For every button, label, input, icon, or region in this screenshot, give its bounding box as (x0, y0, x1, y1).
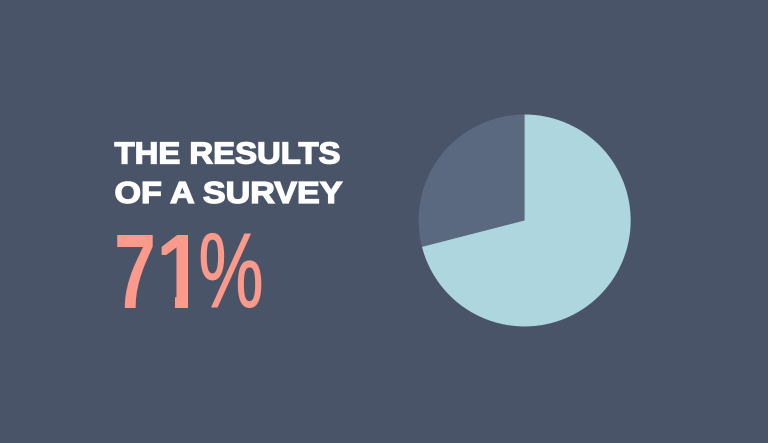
infographic canvas (114, 114, 631, 326)
percentage value (117, 232, 262, 308)
percentage value: 1 (156, 213, 206, 331)
pie slice: 71 percent (422, 114, 631, 327)
title: THE RESULTS (114, 136, 340, 170)
percentage value: % (198, 212, 264, 330)
pie chart (419, 114, 631, 327)
percentage value: 7 (114, 213, 156, 331)
title (114, 136, 343, 210)
pie slice: remainder (419, 114, 631, 326)
title: OF A SURVEY (114, 175, 343, 210)
